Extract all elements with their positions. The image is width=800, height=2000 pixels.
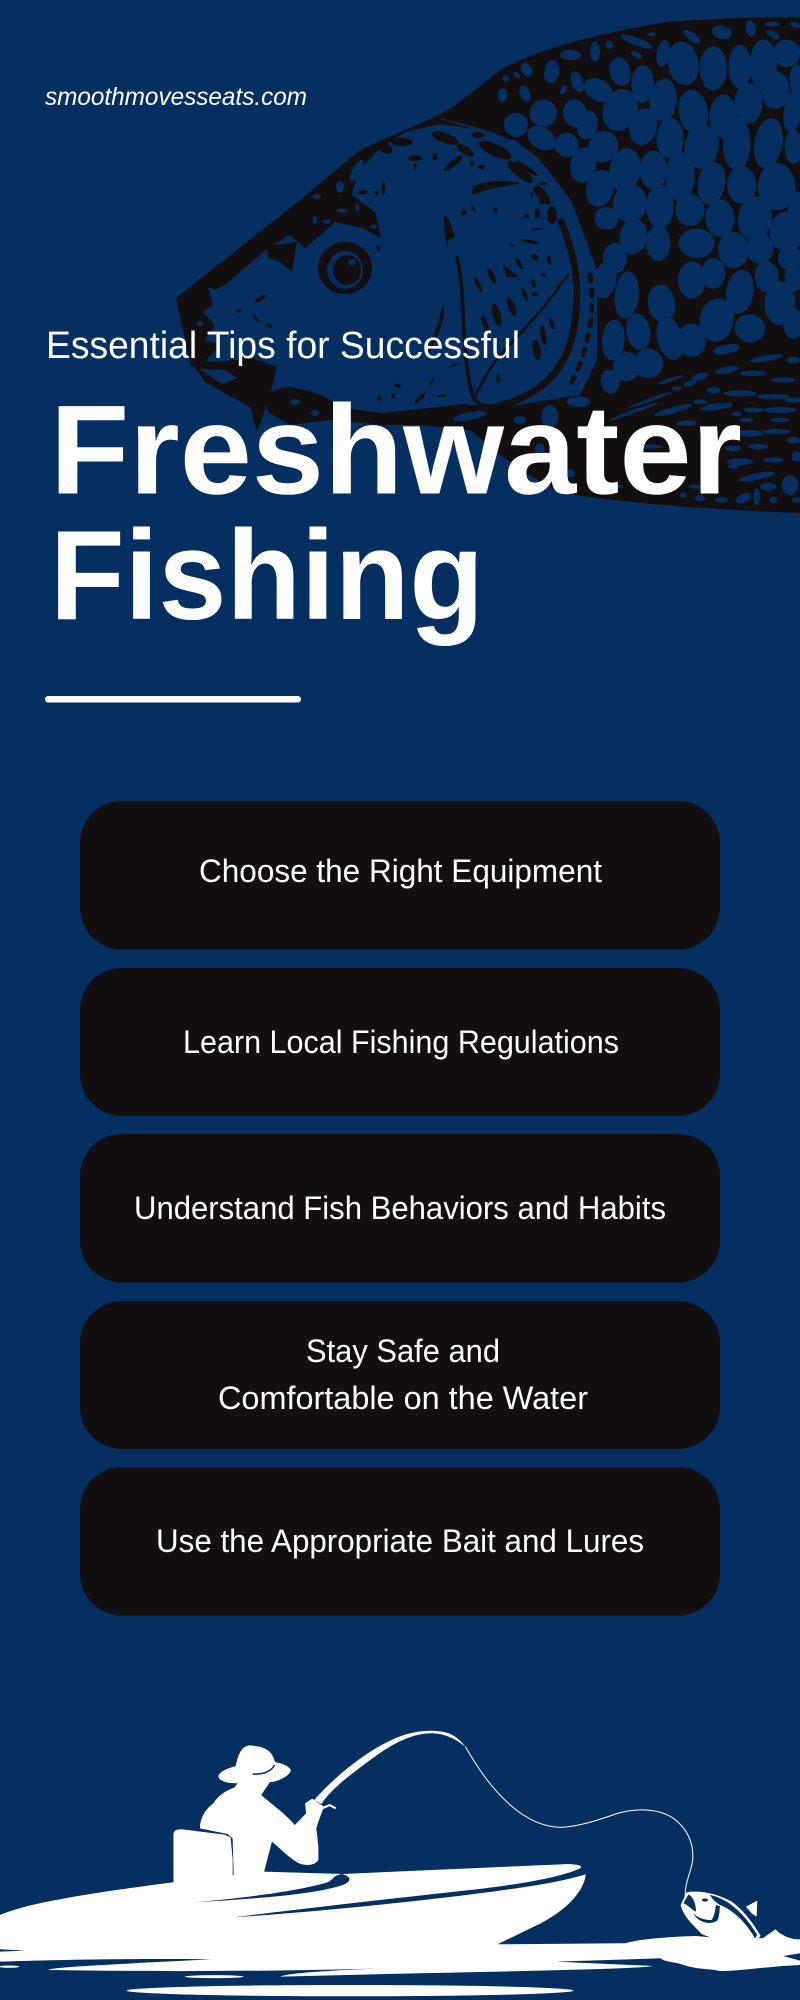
title underline: [45, 696, 301, 702]
website label: smoothmovesseats.com: [45, 83, 307, 111]
leaping fish tail: [746, 1901, 757, 1917]
leaping fish mouth: [683, 1895, 696, 1912]
card: use the appropriate bait and lures: Use the Appropriate Bait and Lures: [156, 1523, 644, 1559]
fish navy spots under gill: [290, 399, 487, 423]
fish head speckle: neck and brow: [267, 129, 557, 272]
card: learn local fishing regulations: [80, 968, 720, 1116]
fish head marks: [236, 149, 556, 361]
water reflection small: [185, 1975, 244, 1978]
water reflection left: [0, 1965, 19, 1968]
leaping fish body: [681, 1892, 761, 1940]
boat hull and water: [0, 1864, 800, 1977]
hull gap: [234, 1867, 586, 1917]
card: choose the right equipment: [80, 801, 720, 950]
subtitle: Essential Tips for Successful: [46, 325, 520, 367]
leaping fish gill stripe: [693, 1905, 720, 1923]
leaping fish back stripe: [710, 1895, 757, 1938]
boat seat: [173, 1829, 233, 1887]
fish jaw marks: [377, 310, 500, 405]
card: learn local fishing regulations: Learn Local Fishing Regulations: [183, 1024, 619, 1060]
card: stay safe and comfortable on the water: Comfortable on the Water: [218, 1380, 588, 1416]
fish pectoral fin spots: [503, 352, 800, 506]
angler body: [200, 1780, 324, 1875]
card: understand fish behaviors and habits: Understand Fish Behaviors and Habits: [134, 1190, 666, 1226]
title: Fishing: [50, 504, 484, 646]
hat band: [253, 1765, 274, 1774]
fish main scale rows: [500, 41, 800, 272]
card: stay safe and comfortable on the water: Stay Safe and: [306, 1333, 500, 1369]
fishing line: [465, 1747, 693, 1897]
cockpit gap: [194, 1874, 349, 1902]
title: Freshwater: [50, 378, 742, 520]
rod reel: [322, 1805, 336, 1808]
fish eye: [318, 242, 372, 294]
angler hat: [218, 1745, 291, 1783]
fish scales upper: [498, 19, 800, 272]
card: choose the right equipment: Choose the Right Equipment: [199, 853, 602, 889]
fish mouth and jaw: [190, 358, 277, 432]
title: [50, 378, 742, 646]
fish gill lines: [428, 222, 592, 408]
card: stay safe and comfortable on the water: [80, 1301, 720, 1449]
fish lower scale rows: [593, 260, 800, 393]
illustration: large engraved fish: [176, 17, 800, 513]
illustration: leaping fish: [681, 1892, 761, 1940]
fish body dark mass: [434, 17, 800, 513]
card: use the appropriate bait and lures: [80, 1467, 720, 1616]
fish head top band: [176, 117, 474, 367]
water reflection large: [127, 1985, 573, 1996]
fishing rod: [314, 1731, 465, 1804]
leaping fish eye: [702, 1898, 708, 1902]
card: understand fish behaviors and habits: [80, 1134, 720, 1282]
fish head band mottling: [197, 158, 389, 326]
fish lower head band: [265, 387, 561, 493]
fish scales lower: [503, 260, 800, 506]
illustration: angler in boat: [0, 1731, 800, 1996]
